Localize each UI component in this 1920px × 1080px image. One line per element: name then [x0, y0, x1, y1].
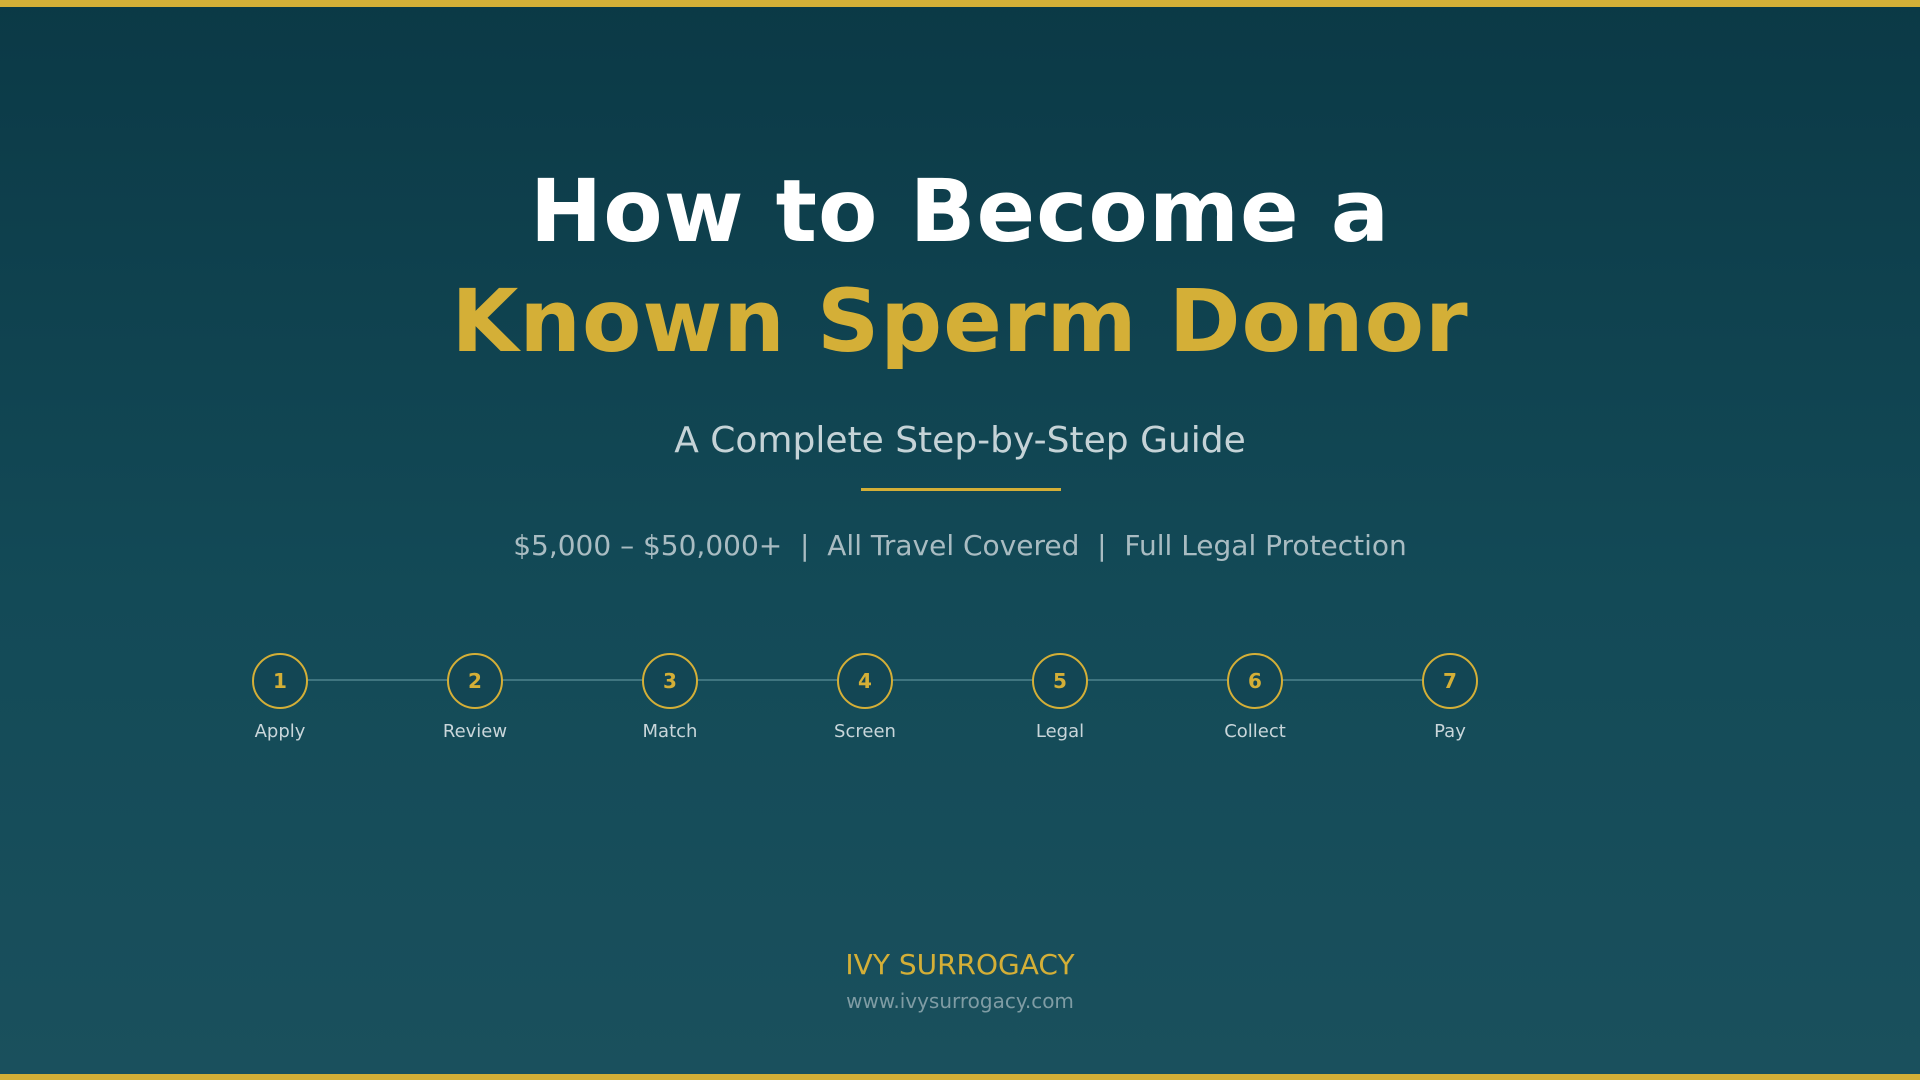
- step 2: 2: [468, 669, 482, 693]
- step 6: [1224, 653, 1286, 742]
- step 7: [1422, 653, 1478, 742]
- step 4: Screen: [834, 721, 896, 742]
- title line 1: How to Become a: [530, 162, 1390, 262]
- step 1: [252, 653, 308, 742]
- step 3: 3: [663, 669, 677, 693]
- top gold bar: [0, 0, 1920, 7]
- subtitle: A Complete Step-by-Step Guide: [674, 420, 1246, 461]
- step 7: 7: [1443, 669, 1457, 693]
- step 6: Collect: [1224, 721, 1286, 742]
- step 6: 6: [1248, 669, 1262, 693]
- step 7: Pay: [1434, 721, 1466, 742]
- step 5: 5: [1053, 669, 1067, 693]
- timeline connector: [280, 679, 1450, 681]
- step 4: 4: [858, 669, 872, 693]
- key facts line: $5,000 – $50,000+ | All Travel Covered | Full Legal Protection: [513, 529, 1407, 562]
- step 3: [642, 653, 698, 742]
- step 1: 1: [273, 669, 287, 693]
- brand name: IVY SURROGACY: [845, 948, 1075, 981]
- title line 2: Known Sperm Donor: [451, 272, 1469, 372]
- step 5: Legal: [1036, 721, 1084, 742]
- step 2: Review: [443, 721, 507, 742]
- step 3: Match: [643, 721, 697, 742]
- step 2: [443, 653, 507, 742]
- website url: www.ivysurrogacy.com: [846, 989, 1074, 1013]
- step 4: [834, 653, 896, 742]
- bottom gold bar: [0, 1074, 1920, 1080]
- title: [451, 162, 1469, 372]
- gold divider: [861, 488, 1061, 491]
- step 5: [1032, 653, 1088, 742]
- timeline steps: [252, 653, 1478, 742]
- step 1: Apply: [255, 721, 305, 742]
